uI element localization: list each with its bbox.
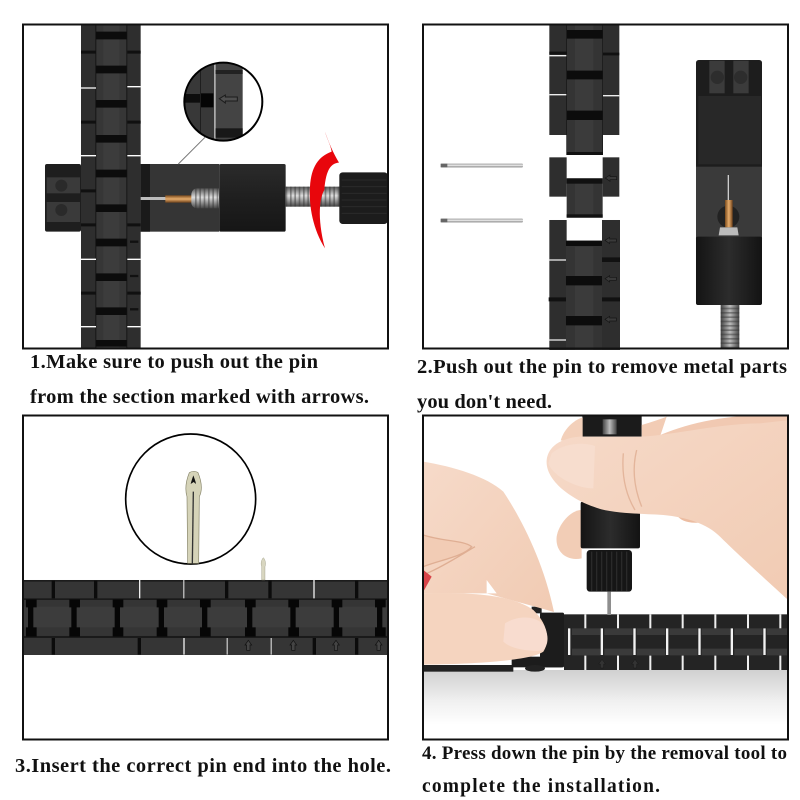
panel 3 border (23, 416, 388, 740)
lower left hand with thumb (423, 462, 554, 665)
caption 2: 2.Push out the pin to remove metal parts (417, 356, 787, 378)
tool knob (587, 550, 632, 592)
panel: step 3 insert pin (23, 434, 388, 655)
inset line (178, 137, 205, 164)
bracelet with clasp (423, 607, 788, 672)
panel: step 4 press pin photo (423, 415, 790, 739)
caption 3: 3.Insert the correct pin end into the hole. (15, 755, 391, 777)
panel 1 border (23, 24, 388, 348)
table shadow (424, 670, 787, 712)
removal tool (45, 164, 388, 232)
panel: step 2 remove links (441, 25, 762, 350)
caption 2 (417, 356, 787, 413)
removed link section (549, 157, 619, 218)
horizontal watch bracelet (23, 580, 388, 655)
upper bracelet section (549, 25, 619, 155)
lower bracelet section (549, 220, 620, 350)
caption 1: from the section marked with arrows. (30, 386, 369, 408)
vertical watch bracelet (80, 24, 141, 349)
two spring pins (441, 164, 523, 222)
caption 4: 4. Press down the pin by the removal tool to (422, 743, 787, 764)
upright removal tool (696, 60, 762, 349)
finger behind tool (557, 510, 582, 559)
finger tip behind clamp (561, 417, 583, 441)
caption 2: you don't need. (417, 391, 552, 413)
caption 1: 1.Make sure to push out the pin (30, 351, 319, 373)
tool pin (607, 592, 611, 615)
panel: step 1 remove pin (45, 24, 388, 349)
caption 1 (30, 351, 369, 408)
caption 4: complete the installation. (422, 776, 660, 797)
panel 4 border (423, 416, 788, 740)
tool top clamp (582, 415, 642, 437)
caption 4 (422, 743, 787, 797)
panel 2 border (423, 24, 788, 348)
magnifier circle with pin end (126, 434, 256, 564)
small pin in hole (261, 558, 266, 580)
tool cylinder (581, 502, 640, 548)
icon: red curved arrow (310, 132, 339, 248)
inset magnifier circle (183, 60, 262, 141)
upper hand with thumb (547, 415, 790, 602)
